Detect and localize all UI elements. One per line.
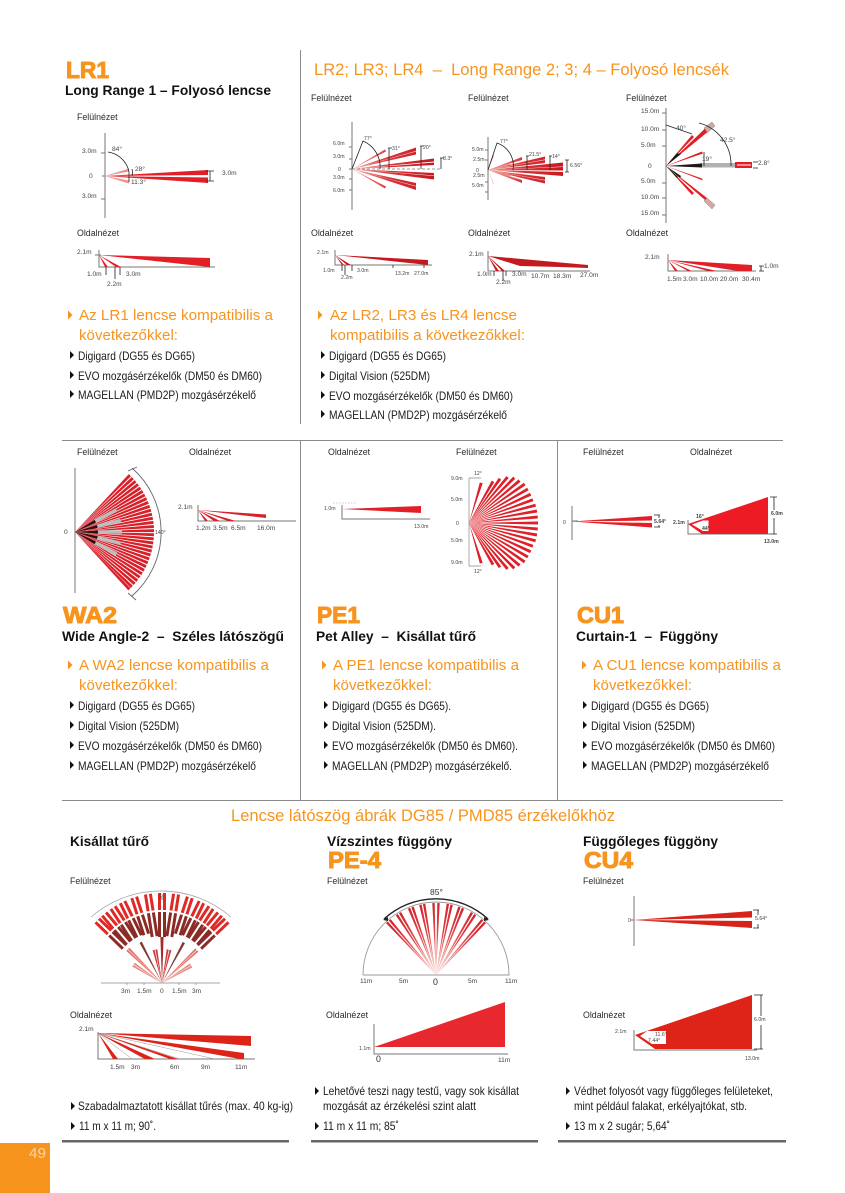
chart: WA2 side view [178,504,296,532]
chart: pet side view: 9m [201,1064,211,1071]
chart: pet side view: 3m [131,1064,141,1071]
divider lines [62,440,783,800]
divider [300,50,302,424]
list: CU1 devices: MAGELLAN (PMD2P) mozgásérzékelő [591,759,769,773]
label: side view: Oldalnézet [583,1010,626,1020]
chart: CU1 top view: 0 [563,520,566,526]
chart: PE-4 side view: 1.1m [359,1046,371,1052]
subtitle: LR1: Long Range 1 – Folyosó lencse [65,82,271,98]
chart: LR3 side view: 2.2m [496,279,511,286]
chart: LR3 side view: 1.0m [477,271,492,278]
heading: LR2 LR3 LR4: LR2; LR3; LR4 – Long Range 2; 3; 4 – Folyosó lencsék [314,60,729,79]
chart: CU4 side view: 7.44° [648,1038,660,1044]
label: WA2 views: Felülnézet [77,447,118,457]
chart: CU1 top view: 5.64° [654,519,666,525]
chart: WA2 top view [64,467,166,600]
chart: LR3 top view: 5.0m [472,147,484,153]
list: WA2 devices: EVO mozgásérzékelők (DM50 és DM60) [78,739,262,753]
label: top view: Felülnézet [327,876,368,886]
rule [558,1140,786,1142]
panel: LR1 [65,57,274,402]
chart: LR4 top view: 0 [648,163,652,170]
chart: CU1 side view: 13.0m [764,539,779,545]
chart: PE-4 side view: 11m [498,1057,511,1064]
chart: PE-4 side view: 0 [376,1054,381,1064]
intro: LR2 compatibility: Az LR2, LR3 és LR4 lencse [330,307,517,324]
title: WA2: WA2 [63,602,117,628]
intro: LR1 compatibility: következőkkel: [79,327,178,344]
label: side views: Oldalnézet [311,228,354,238]
list: LR2 devices: Digital Vision (525DM) [329,369,430,383]
chart: PE1 top view [451,471,538,575]
chart: CU1 side view: 16° [696,514,704,520]
chart: LR4 top view: 19° [702,155,712,163]
list: LR1 devices [70,349,262,402]
panel: Kisállat tűrő [62,833,293,1142]
chart: PE1 top view: 9.0m [451,476,463,482]
chart: CU1 side view [673,497,783,545]
intro: PE1 compatibility: következőkkel: [333,677,432,694]
list: PE-4 features: Lehetővé teszi nagy testű, vagy sok kisállat [323,1084,520,1098]
chart: LR4 top view: 5.0m [641,178,656,185]
chart: CU4 side view [615,995,766,1062]
chart: pet top view [91,891,231,995]
chart: LR2 top view: 3.0m [333,175,345,181]
label: top view: Felülnézet [70,876,111,886]
chart: CU1 side view: 44° [702,526,710,532]
chart: pet side view: 2.1m [79,1026,94,1033]
chart: PE1 top view: 9.0m [451,560,463,566]
chart: LR2 side view: 2.1m [317,250,329,256]
chart: PE1 side view [324,503,430,530]
chart: CU4 top view: 5.64° [755,916,767,922]
chart: LR2 top view: 6.0m [333,141,345,147]
chart: LR4 side view [645,254,779,283]
list: CU1 devices: EVO mozgásérzékelők (DM50 és DM60) [591,739,775,753]
label: PE1 views [328,447,497,457]
chart: LR3 side view: 2.1m [469,251,484,258]
list: PE-4 features: mozgását az érzékelési szint alatt [323,1099,477,1113]
list: WA2 devices: MAGELLAN (PMD2P) mozgásérzékelő [78,759,256,773]
chart: LR1 top view: 28° [135,165,145,173]
list: pet features: 11 m x 11 m; 90˚. [79,1119,156,1133]
list: PE1 devices [324,699,518,773]
chart: LR1 side view: 1.0m [87,271,102,278]
intro: LR1 compatibility [68,307,274,344]
chart: pet top view: 90 [159,894,165,900]
chart: LR2 top view: 20° [423,145,431,151]
chart: LR2 side view [317,250,432,281]
label: WA2 views [77,447,232,457]
list: WA2 devices: Digigard (DG55 és DG65) [78,699,195,713]
chart: LR3 top view: 0 [476,168,479,174]
subtitle: CU1: Curtain-1 – Függöny [576,628,718,644]
chart: LR2 side view: 27.0m [414,271,428,277]
list: CU1 devices: Digigard (DG55 és DG65) [591,699,709,713]
chart: LR3 top view: 2.5m [473,173,485,179]
heading: DG85 PMD85: Lencse látószög ábrák DG85 / PMD85 érzékelőkhöz [231,807,615,825]
chart: CU4 top view: 0 [628,918,631,924]
label: top views: Felülnézet [311,93,352,103]
chart: LR3 top view: 77° [500,139,508,145]
chart: LR2 top view: 31° [392,146,400,152]
label: top view: Felülnézet [583,876,624,886]
panel: WA2 [62,447,296,773]
chart: CU4 side view: 2.1m [615,1029,627,1035]
label: side view: Oldalnézet [326,1010,369,1020]
intro: CU1 compatibility [582,657,782,694]
chart: WA2 side view: 6.5m [231,525,246,532]
intro: LR2 compatibility [318,307,525,344]
chart: LR4 top view [641,108,770,223]
chart: CU4 side view: 11.6° [655,1032,667,1038]
chart: LR3 side view: 18.3m [553,273,572,280]
chart: pet side view: 11m [235,1064,248,1071]
chart: LR1 side view: 3.0m [126,271,141,278]
chart: PE-4 side view [359,1002,511,1064]
chart: WA2 side view: 2.1m [178,504,193,511]
chart: CU4 side view: 13.0m [745,1056,759,1062]
list: CU1 devices: Digital Vision (525DM) [591,719,695,733]
chart: LR4 side view: 20.0m [720,276,739,283]
chart: PE-4 top view: 85° [430,887,443,897]
list: LR1 devices: Digigard (DG55 és DG65) [78,349,195,363]
intro: PE1 compatibility [322,657,520,694]
chart: PE1 top view: 5.0m [451,538,463,544]
title: PE-4: PE-4 [328,847,381,873]
chart: CU4 top view [628,896,767,946]
list: CU4 features: mint például falakat, erkélyajtókat, stb. [574,1099,747,1113]
list: CU4 features [566,1084,773,1133]
chart: LR4 side view: 1.5m [667,276,682,283]
chart: PE-4 top view: 0 [433,977,438,987]
intro: CU1 compatibility: következőkkel: [593,677,692,694]
chart: WA2 side view: 3.5m [213,525,228,532]
label: side views [311,228,669,238]
chart: LR4 side view: 30.4m [742,276,761,283]
chart: LR2 top view: 6.0m [333,188,345,194]
list: WA2 devices: Digital Vision (525DM) [78,719,179,733]
label: side view: Oldalnézet [70,1010,113,1020]
list: LR2 devices: MAGELLAN (PMD2P) mozgásérzékelő [329,408,507,422]
chart: PE-4 top view: 5m [399,978,409,985]
chart: LR4 top view: 15.0m [641,108,660,115]
chart: LR2 top view: 8.3° [443,156,452,162]
chart: PE1 side view: 13.0m [414,524,428,530]
list: CU4 features: Védhet folyosót vagy függőleges felületeket, [574,1084,773,1098]
chart: CU1 side view: 6.0m [771,511,783,517]
list: PE1 devices: Digigard (DG55 és DG65). [332,699,451,713]
chart: LR2 top view: 3.0m [333,154,345,160]
subtitle: Kisállat tűrő: Kisállat tűrő [70,833,149,849]
chart: LR1 side view: 2.1m [77,249,92,256]
subtitle: Függőleges függöny: Függőleges függöny [583,833,718,849]
chart: LR2 top view: 0 [338,167,341,173]
intro: LR2 compatibility: kompatibilis a következőkkel: [330,327,525,344]
chart: LR4 top view: 10.0m [641,194,660,201]
chart: WA2 side view: 16.0m [257,525,276,532]
chart: LR4 side view: 2.1m [645,254,660,261]
title: CU4: CU4 [584,847,633,873]
intro: LR1 compatibility: Az LR1 lencse kompatibilis a [79,307,274,324]
list: LR1 devices: MAGELLAN (PMD2P) mozgásérzékelő [78,388,256,402]
chart: WA2 top view: 0 [64,529,68,536]
intro: WA2 compatibility: A WA2 lencse kompatibilis a [79,657,270,674]
label: CU1 views: Felülnézet [583,447,624,457]
chart: LR3 side view: 27.0m [580,272,599,279]
page number tab [0,1143,50,1193]
list: LR1 devices: EVO mozgásérzékelők (DM50 és DM60) [78,369,262,383]
chart: pet top view: 3m [192,988,202,995]
label: top views [311,93,667,103]
chart: CU1 top view [563,506,666,540]
chart: pet side view: 6m [170,1064,180,1071]
chart: LR3 side view [469,251,599,286]
list: PE1 devices: EVO mozgásérzékelők (DM50 és DM60). [332,739,518,753]
label: side views: Oldalnézet [626,228,669,238]
label: PE1 views: Felülnézet [456,447,497,457]
chart: WA2 side view: 1.2m [196,525,211,532]
list: CU4 features: 13 m x 2 sugár; 5,64˚ [574,1119,670,1133]
rule [311,1140,538,1142]
chart: pet top view: 1.5m [172,988,187,995]
chart: PE1 top view: 5.0m [451,497,463,503]
chart: PE1 top view: 12° [474,569,482,575]
chart: PE-4 top view: 11m [360,978,373,985]
label: CU1 views [583,447,733,457]
subtitle: WA2: Wide Angle-2 – Széles látószögű [62,628,284,644]
chart: LR2 side view: 1.0m [323,268,335,274]
list: CU1 devices [583,699,775,773]
intro: WA2 compatibility: következőkkel: [79,677,178,694]
intro: PE1 compatibility: A PE1 lencse kompatibilis a [333,657,520,674]
chart: PE-4 top view [360,887,518,987]
chart: PE-4 top view: 5m [468,978,478,985]
chart: LR1 top view: 84° [112,145,122,153]
list: PE1 devices: MAGELLAN (PMD2P) mozgásérzékelő. [332,759,512,773]
intro: CU1 compatibility: A CU1 lencse kompatibilis a [593,657,782,674]
list: PE-4 features: 11 m x 11 m; 85˚ [323,1119,399,1133]
chart: LR3 top view: 6.56° [570,163,582,169]
chart: LR3 side view: 10.7m [531,273,550,280]
chart: PE1 side view: 1.0m [324,506,336,512]
chart: PE-4 top view: 11m [505,978,518,985]
label: WA2 views: Oldalnézet [189,447,232,457]
list: PE1 devices: Digital Vision (525DM). [332,719,436,733]
list: pet features [71,1099,293,1133]
chart: LR2 side view: 3.0m [357,268,369,274]
chart: LR1 side view [77,249,215,288]
chart: LR4 top view: 15.0m [641,210,660,217]
rule [62,1140,289,1142]
list: PE-4 features [315,1084,520,1133]
chart: LR3 top view: 21.5° [529,152,541,158]
chart: LR3 top view: 14° [552,154,560,160]
chart: pet top view: 1.5m [137,988,152,995]
chart: LR1 top view: 0 [89,173,93,180]
list: pet features: Szabadalmaztatott kisállat tűrés (max. 40 kg-ig) [78,1099,293,1113]
chart: LR2 top view: 77° [364,136,372,142]
chart: pet top view: 0 [160,988,164,995]
list: LR2 devices [321,349,513,422]
list: LR2 devices: Digigard (DG55 és DG65) [329,349,446,363]
chart: LR3 top view [472,137,582,200]
chart: LR1 side view: 2.2m [107,281,122,288]
chart: LR1 top view: 3.0m [222,170,237,177]
chart: LR3 side view: 3.0m [512,271,527,278]
chart: pet top view: 3m [121,988,131,995]
chart: LR2 side view: 2.2m [341,275,353,281]
chart: LR4 top view: 2.8° [758,159,770,167]
panel: CU4 [558,833,786,1142]
chart: CU4 side view: 6.0m [754,1017,766,1023]
chart: LR3 top view: 2.5m [473,157,485,163]
chart: PE1 top view: 0 [456,521,459,527]
list: LR2 devices: EVO mozgásérzékelők (DM50 és DM60) [329,389,513,403]
chart: LR4 top view: 5.0m [641,142,656,149]
label: side views: Oldalnézet [468,228,511,238]
chart: LR4 top view: 40° [676,124,686,132]
panel: LR2 LR3 LR4 [300,50,779,424]
label: top view: Felülnézet [77,112,118,122]
panel: PE1 [316,447,538,773]
chart: LR4 side view: 10.0m [700,276,719,283]
list: WA2 devices [70,699,262,773]
title: LR1: LR1 [66,57,109,83]
chart: LR3 top view: 5.0m [472,183,484,189]
chart: pet side view [79,1026,255,1071]
title: CU1: CU1 [577,602,624,628]
chart: WA2 top view: 140° [155,530,166,536]
chart: pet side view: 1.5m [110,1064,125,1071]
subtitle: Vízszintes függöny: Vízszintes függöny [327,833,452,849]
panel: CU1 [563,447,783,773]
chart: LR2 side view: 13.2m [395,271,409,277]
chart: LR4 top view: 10.0m [641,126,660,133]
chart: LR1 top view: 3.0m [82,148,97,155]
chart: LR1 top view: 3.0m [82,193,97,200]
label: top views: Felülnézet [626,93,667,103]
chart: CU1 side view: 2.1m [673,520,685,526]
title: PE1: PE1 [317,602,360,628]
chart: LR1 top view: 11.3° [131,178,146,186]
label: PE1 views: Oldalnézet [328,447,371,457]
label: CU1 views: Oldalnézet [690,447,733,457]
chart: LR2 top view [333,122,452,210]
subtitle: PE1: Pet Alley – Kisállat tűrő [316,628,476,644]
chart: PE1 top view: 12° [474,471,482,477]
chart: LR4 top view: 42.5° [720,136,736,144]
intro: WA2 compatibility [68,657,270,694]
chart: LR4 side view: 1.0m [764,263,779,270]
chart: LR1 top view [82,133,237,218]
chart: LR4 side view: 3.0m [683,276,698,283]
panel: PE-4 [311,833,538,1142]
label: top views: Felülnézet [468,93,509,103]
page number tab: 49 [29,1145,46,1162]
label: side view: Oldalnézet [77,228,120,238]
